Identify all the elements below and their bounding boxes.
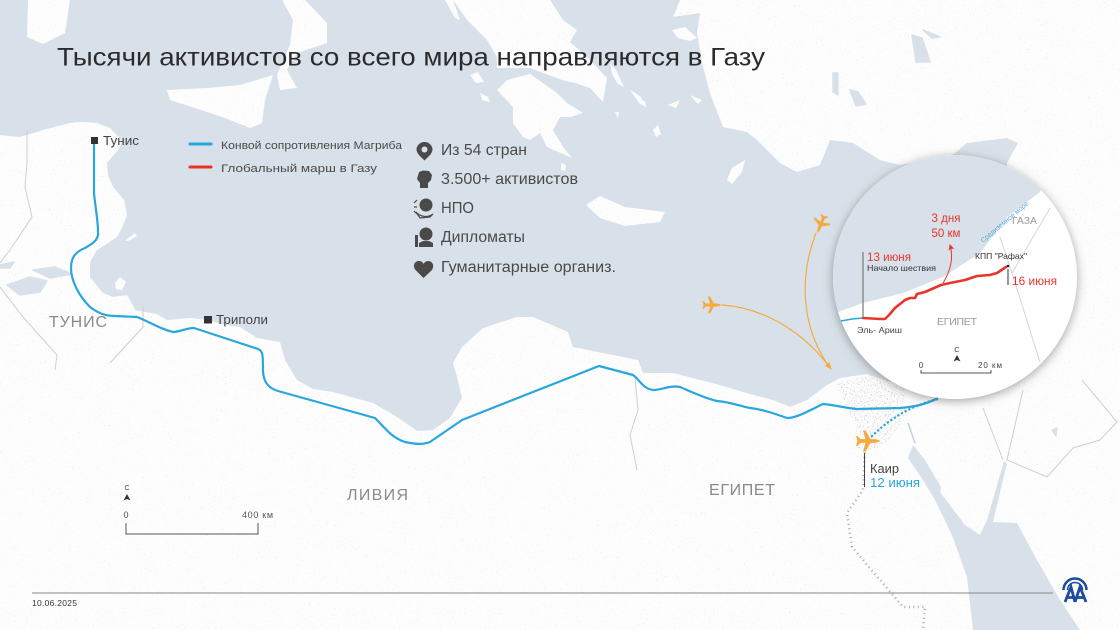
country label: Libya: ЛИВИЯ [347,487,408,504]
date: 10.06.2025 [32,598,77,608]
inset: scale bar [919,345,1002,373]
Cairo label [864,453,920,490]
inset: scale bar: С [954,345,960,354]
stat: activists: 3.500+ активистов [441,171,578,188]
stat: diplomats [415,228,525,247]
inset: Mediterranean Sea label: Средиземное море [980,201,1030,245]
stat: countries: Из 54 стран [441,142,527,159]
city marker: Tripoli: Триполи [216,313,268,327]
inset: Rafah crossing label: КПП "Рафах" [975,251,1027,261]
country label: Egypt: ЕГИПЕТ [709,482,775,499]
inset sea [833,155,1040,312]
inset: distance label: 3 дня [932,213,960,225]
icon: plane north [809,212,832,236]
inset: scale bar: 20 км [978,361,1002,370]
inset: blue convoy segment [841,318,863,321]
inset: red march route [863,267,1006,319]
inset: Rafah crossing label: 16 июня [1012,276,1057,288]
route: Maghreb resistance convoy (blue) [71,144,938,444]
stats list [414,142,616,278]
stat: humanitarian organisations: Гуманитарные организ. [441,259,616,276]
inset: scale bar: 0 [919,361,924,370]
Cairo label: 12 июня [870,476,920,490]
stat: NGOs: НПО [441,200,474,217]
main scale bar: 400 км [242,510,273,520]
inset: distance label: 50 км [932,228,961,240]
legend item: convoy: Конвой сопротивления Магриба [221,140,403,152]
city marker: Tunis [91,134,139,148]
icon: plane Cairo [856,430,880,452]
icon: plane west [702,296,722,314]
inset: start label: 13 июня [867,252,911,264]
flight arrow from north [805,233,831,369]
city marker: Tunis: Тунис [103,134,139,148]
route: dotted blue link to Cairo [870,399,938,438]
inset: Gaza label: ГАЗА [1012,215,1037,227]
stat: NGOs [414,198,474,218]
title: Тысячи активистов со всего мира направляются в Газу [57,44,766,72]
footer rule [32,592,1053,594]
inset: Rafah crossing label [975,251,1057,288]
logo: AA [1064,578,1086,602]
inset: distance label [932,213,961,240]
main scale bar [123,485,273,534]
country label: Tunisia: ТУНИС [49,314,107,331]
inset: red arrow to distance label [943,245,952,283]
legend [190,140,403,175]
inset: start label: Начало шествия [867,263,936,273]
stat: diplomats: Дипломаты [441,229,525,246]
inset: El Arish label: Эль- Ариш [857,325,902,335]
main scale bar: 0 [123,510,129,520]
legend item: march: Глобальный марш в Газу [221,163,378,175]
Cairo label: Каир [870,462,899,476]
inset: start label [863,252,936,318]
main scale bar: С [124,485,130,492]
inset: Egypt label: ЕГИПЕТ [937,316,978,328]
inset map circle [820,140,1077,399]
flight arrow from west [722,305,831,369]
